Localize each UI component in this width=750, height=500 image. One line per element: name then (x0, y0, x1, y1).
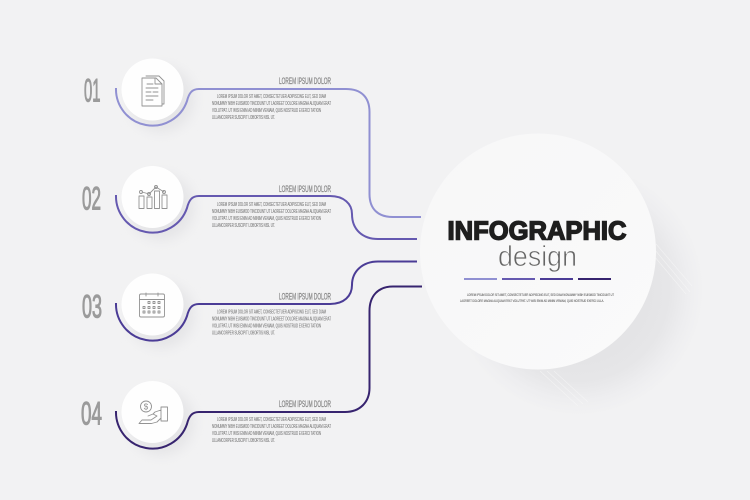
body text: NONUMMY NIBH EUISMOD TINCIDUNT UT LAOREET DOLORE MAGNA ALIQUAM ERAT (212, 209, 331, 215)
body text: VOLUTPAT. UT WISI ENIM AD MINIM VENIAM, QUIS NOSTRUD EXERCI TATION (212, 431, 321, 437)
body text: VOLUTPAT. UT WISI ENIM AD MINIM VENIAM, QUIS NOSTRUD EXERCI TATION (212, 324, 321, 330)
body text: LOREM IPSUM DOLOR SIT AMET, CONSECTETUER ADIPISCING ELIT, SED DIAM (217, 202, 326, 208)
circle (122, 166, 184, 228)
number 03: 03 (82, 288, 102, 324)
step 2 (82, 166, 331, 240)
circle shadow (128, 66, 194, 132)
icon: documents (142, 76, 164, 106)
body text: LOREM IPSUM DOLOR SIT AMET, CONSECTETUER ADIPISCING ELIT, SED DIAM (217, 310, 326, 316)
icon: hand with coin (139, 401, 168, 424)
title: INFOGRAPHIC (448, 217, 626, 245)
body text (212, 94, 331, 121)
heading: LOREM IPSUM DOLOR (279, 184, 331, 195)
circle (122, 274, 184, 336)
heading: LOREM IPSUM DOLOR (279, 76, 331, 87)
body text: NONUMMY NIBH EUISMOD TINCIDUNT UT LAOREET DOLORE MAGNA ALIQUAM ERAT (212, 424, 331, 430)
circle shadow (128, 282, 194, 348)
body text (212, 417, 331, 444)
body text: ULLAMCORPER SUSCIPIT LOBORTIS NISL UT. (212, 330, 275, 336)
subtitle: design (498, 241, 577, 273)
centre body text: LOREM IPSUM DOLOR SIT AMET, CONSECTETUER ADIPISCING ELIT, SED DIAM NONUMMY NIBH EUISMOD TINCIDUNT UT (467, 292, 614, 297)
icon: calendar (140, 293, 164, 317)
body text: LOREM IPSUM DOLOR SIT AMET, CONSECTETUER ADIPISCING ELIT, SED DIAM (217, 417, 326, 423)
body text: LOREM IPSUM DOLOR SIT AMET, CONSECTETUER ADIPISCING ELIT, SED DIAM (217, 94, 326, 100)
body text (212, 202, 331, 229)
icon: hand with coin: $ (144, 402, 149, 412)
icon: bar chart (139, 186, 167, 208)
body text (212, 310, 331, 336)
main circle long shadow (452, 164, 704, 416)
circle (122, 381, 184, 443)
body text: VOLUTPAT. UT WISI ENIM AD MINIM VENIAM, QUIS NOSTRUD EXERCI TATION (212, 216, 321, 222)
connector: step 1 to centre (116, 88, 421, 217)
centre body text: LAOREET DOLORE MAGNA ALIQUAM ERAT VOLUTPAT. UT WISI ENIM AD MINIM VENIAM, QUIS NOSTRUD EXERCI ULLA. (460, 298, 604, 303)
connector: step 2 to centre (116, 195, 417, 239)
centre body text (460, 292, 614, 303)
circle shadow (128, 174, 194, 240)
step 1 (84, 58, 331, 132)
heading: LOREM IPSUM DOLOR (279, 292, 331, 302)
connector: step 4 to centre (116, 286, 422, 449)
body text: ULLAMCORPER SUSCIPIT LOBORTIS NISL UT. (212, 115, 275, 121)
body text: ULLAMCORPER SUSCIPIT LOBORTIS NISL UT. (212, 438, 275, 444)
connector: step 3 to centre (116, 262, 417, 341)
step 3 (82, 274, 331, 348)
circle (122, 58, 184, 120)
heading: LOREM IPSUM DOLOR (279, 399, 331, 410)
step 1: 01 (84, 72, 100, 108)
number 04: 04 (81, 396, 102, 432)
number 02: 02 (82, 180, 101, 216)
body text: NONUMMY NIBH EUISMOD TINCIDUNT UT LAOREET DOLORE MAGNA ALIQUAM ERAT (212, 101, 331, 107)
colour dashes (464, 278, 611, 280)
body text: ULLAMCORPER SUSCIPIT LOBORTIS NISL UT. (212, 223, 275, 229)
body text: NONUMMY NIBH EUISMOD TINCIDUNT UT LAOREET DOLORE MAGNA ALIQUAM ERAT (212, 316, 331, 322)
circle shadow (128, 389, 194, 455)
step 4 (81, 381, 331, 455)
centre circle (420, 134, 656, 370)
body text: VOLUTPAT. UT WISI ENIM AD MINIM VENIAM, QUIS NOSTRUD EXERCI TATION (212, 108, 321, 114)
